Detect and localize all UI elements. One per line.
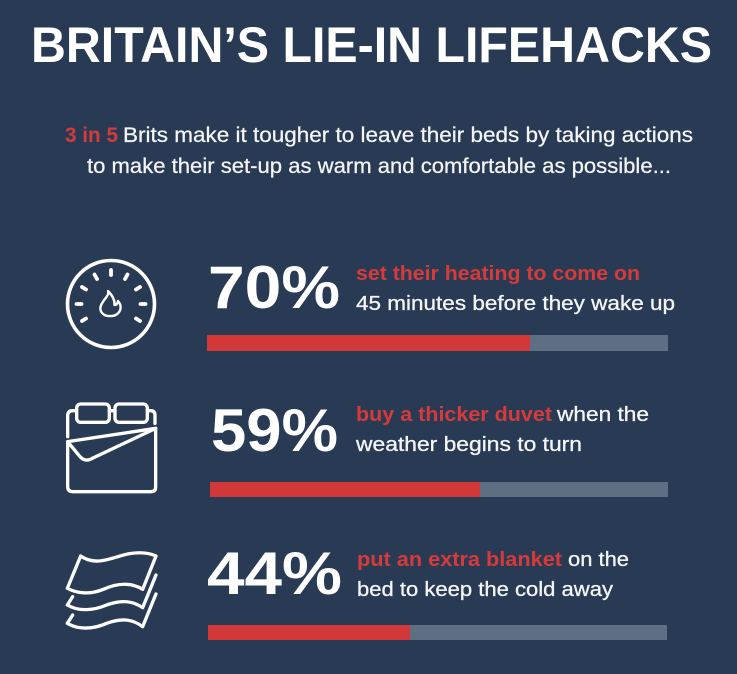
- text: duvet: weather begins to turn: [355, 434, 582, 456]
- bar: 44%: [208, 625, 667, 640]
- stat: 70%: 70%: [208, 254, 340, 321]
- intro text: to make their set-up as warm and comfortable as possible...: [87, 155, 671, 178]
- stat: 44%: 44%: [207, 540, 342, 607]
- text: heating: 45 minutes before they wake up: [356, 293, 675, 315]
- text: blanket: put an extra blanket: [357, 549, 562, 571]
- text: blanket: on the: [568, 549, 629, 571]
- icon: gauge with flame: [68, 260, 154, 348]
- intro text: [65, 124, 693, 178]
- text: heating: [356, 263, 675, 315]
- icon: stacked blankets: [67, 553, 156, 628]
- intro text: Brits make it tougher to leave their beds by taking actions: [123, 124, 693, 147]
- text: blanket: [357, 549, 629, 601]
- text: blanket: bed to keep the cold away: [357, 579, 613, 601]
- bar: 70%: [207, 335, 668, 351]
- text: duvet: [355, 404, 649, 456]
- text: heating: set their heating to come on: [356, 263, 640, 285]
- stat: 59%: 59%: [211, 397, 338, 464]
- text: duvet: buy a thicker duvet: [356, 404, 552, 426]
- icon: bed with pillows: [68, 404, 156, 492]
- bar: 59%: [210, 482, 668, 497]
- intro text: 3 in 5: [65, 124, 118, 147]
- text: duvet: when the: [556, 404, 649, 426]
- title: BRITAIN’S LIE-IN LIFEHACKS: [31, 17, 712, 73]
